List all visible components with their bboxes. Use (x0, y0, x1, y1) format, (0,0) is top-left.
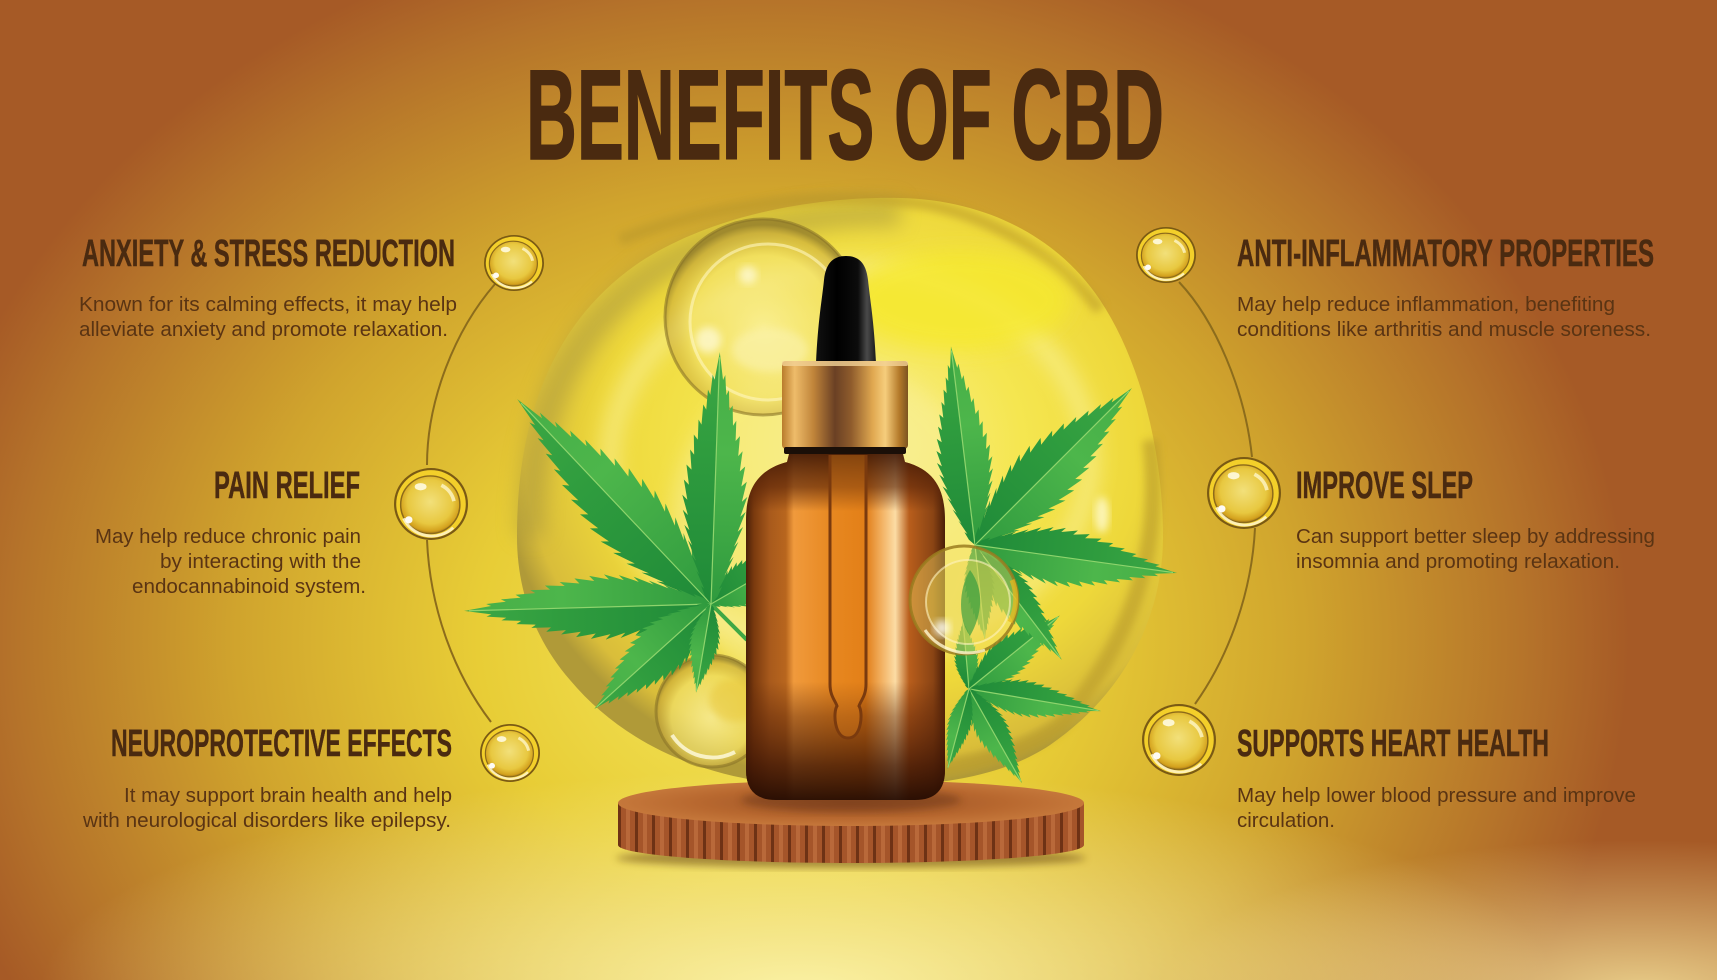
bubble node: pain relief (394, 468, 468, 540)
cannabis leaf right lower (936, 600, 1104, 791)
connector arc left (427, 284, 495, 722)
panel: improve sleep (1296, 465, 1655, 573)
title: BENEFITS OF CBD (526, 44, 1164, 187)
description (82, 785, 452, 832)
description: insomnia and promoting relaxation. (1296, 551, 1620, 573)
description (1296, 526, 1655, 573)
description: conditions like arthritis and muscle soreness. (1237, 319, 1651, 341)
description (1237, 294, 1651, 341)
dropper bottle (746, 256, 945, 800)
bubble node: neuroprotective (480, 724, 540, 782)
oil drop backdrop (517, 198, 1163, 787)
bubble node: anti-inflammatory (1136, 227, 1196, 283)
large oil bubble top (665, 219, 861, 415)
description: Can support better sleep by addressing (1296, 526, 1655, 548)
description: May help reduce inflammation, benefiting (1237, 294, 1615, 316)
heading: NEUROPROTECTIVE EFFECTS (111, 723, 452, 765)
description (95, 526, 366, 598)
description: May help reduce chronic pain (95, 526, 361, 548)
cannabis leaf right upper (923, 343, 1181, 672)
panel: pain relief (95, 465, 366, 598)
panel: supports heart health (1237, 723, 1636, 832)
dropper bulb (816, 256, 876, 363)
heading: IMPROVE SLEP (1296, 465, 1473, 507)
description: by interacting with the (160, 551, 361, 573)
description (79, 294, 457, 341)
wooden podium (616, 780, 1086, 868)
description: alleviate anxiety and promote relaxation. (79, 319, 448, 341)
connector arc right (1179, 282, 1255, 704)
gold collar (782, 361, 908, 454)
description: endocannabinoid system. (132, 576, 366, 598)
oil bubble on bottle (910, 546, 1018, 654)
panel: anxiety and stress reduction (79, 233, 457, 341)
glass pipette (830, 455, 866, 738)
heading: PAIN RELIEF (214, 465, 360, 507)
bubble node: anxiety (484, 235, 544, 291)
description: May help lower blood pressure and improve (1237, 785, 1636, 807)
bubble node: sleep (1207, 457, 1281, 529)
description: It may support brain health and help (124, 785, 452, 807)
description: with neurological disorders like epilepsy. (82, 810, 451, 832)
glass body (746, 450, 945, 800)
description: circulation. (1237, 810, 1335, 832)
panel: anti-inflammatory properties (1237, 233, 1654, 341)
heading: ANXIETY & STRESS REDUCTION (82, 233, 455, 275)
oil bubble lower left (656, 655, 768, 767)
description: Known for its calming effects, it may help (79, 294, 457, 316)
panel: neuroprotective effects (82, 723, 452, 832)
cannabis leaf left (463, 351, 809, 730)
description (1237, 785, 1636, 832)
bubble node: heart health (1142, 704, 1216, 776)
